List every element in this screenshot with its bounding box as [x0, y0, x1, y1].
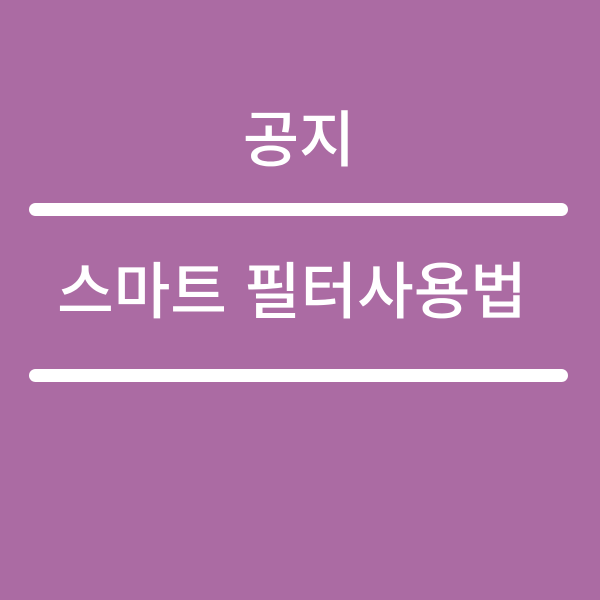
title: 공지 [243, 106, 355, 174]
top divider bar [29, 203, 568, 216]
bottom divider bar [29, 369, 568, 382]
subtitle: 스마트 필터사용법 [57, 258, 527, 327]
